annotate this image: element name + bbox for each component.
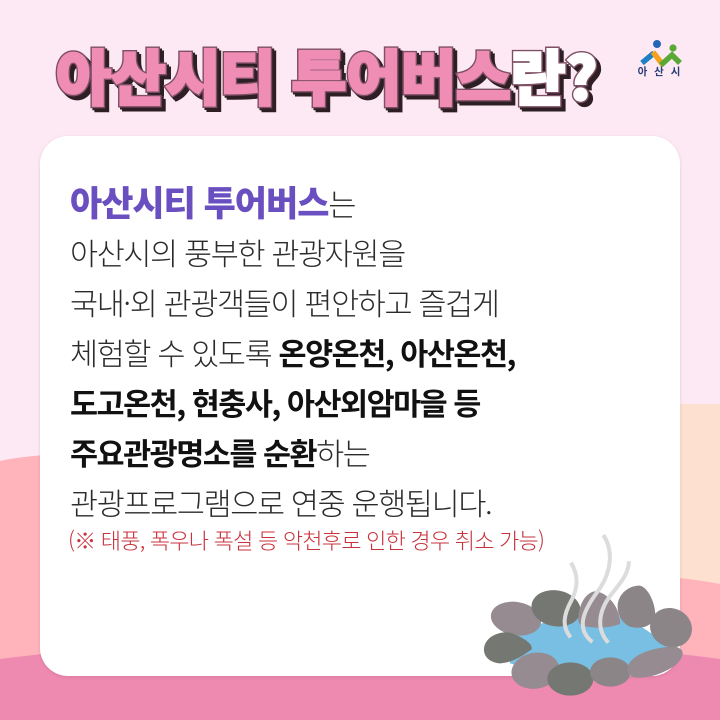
text block: description: 주요관광명소를 순환하는 [70,430,370,474]
text block: description: 관광프로그램으로 연중 운행됩니다. [70,480,491,524]
title: 아산시티 투어버스란? [56,31,596,118]
title: 아산시티 투어버스란? [60,35,600,122]
text block: description: 아산시의 풍부한 관광자원을 [70,230,405,274]
text block: description: 국내·외 관광객들이 편안하고 즐겁게 [70,280,499,324]
icon: Asan city logo: 아 산 시 [638,64,682,79]
title: 아산시티 투어버스란? [56,31,596,118]
text block: description: 아산시티 투어버스는 [70,176,355,227]
text block: description: 도고온천, 현충사, 아산외암마을 등 [70,380,480,424]
text block: description: 체험할 수 있도록 온양온천, 아산온천, [70,330,515,374]
icon: Asan city logo [638,40,682,79]
panel: white card [40,136,680,676]
text block: description [70,176,515,524]
title: 아산시티 투어버스란? [58,33,598,120]
note: cancellation notice: (※ 태풍, 폭우나 폭설 등 악천후로 인한 경우 취소 가능) [68,524,544,556]
icon: hot spring [484,534,692,696]
